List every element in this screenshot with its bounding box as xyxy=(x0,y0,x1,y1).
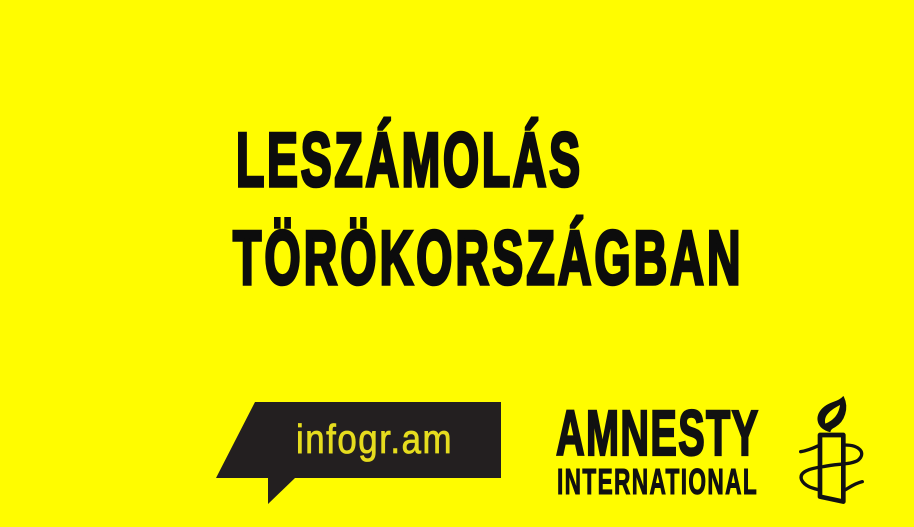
infogr.am speech bubble logo xyxy=(216,402,501,504)
Amnesty International wordmark xyxy=(556,399,758,502)
title xyxy=(233,118,741,301)
Amnesty International wordmark: INTERNATIONAL xyxy=(557,463,757,502)
infogr.am speech bubble logo: infogr.am xyxy=(296,417,452,463)
title: LESZÁMOLÁS xyxy=(236,118,580,203)
Amnesty International wordmark: AMNESTY xyxy=(556,399,758,469)
title: TÖRÖKORSZÁGBAN xyxy=(233,216,741,301)
icon: candle in barbed wire xyxy=(801,397,862,502)
